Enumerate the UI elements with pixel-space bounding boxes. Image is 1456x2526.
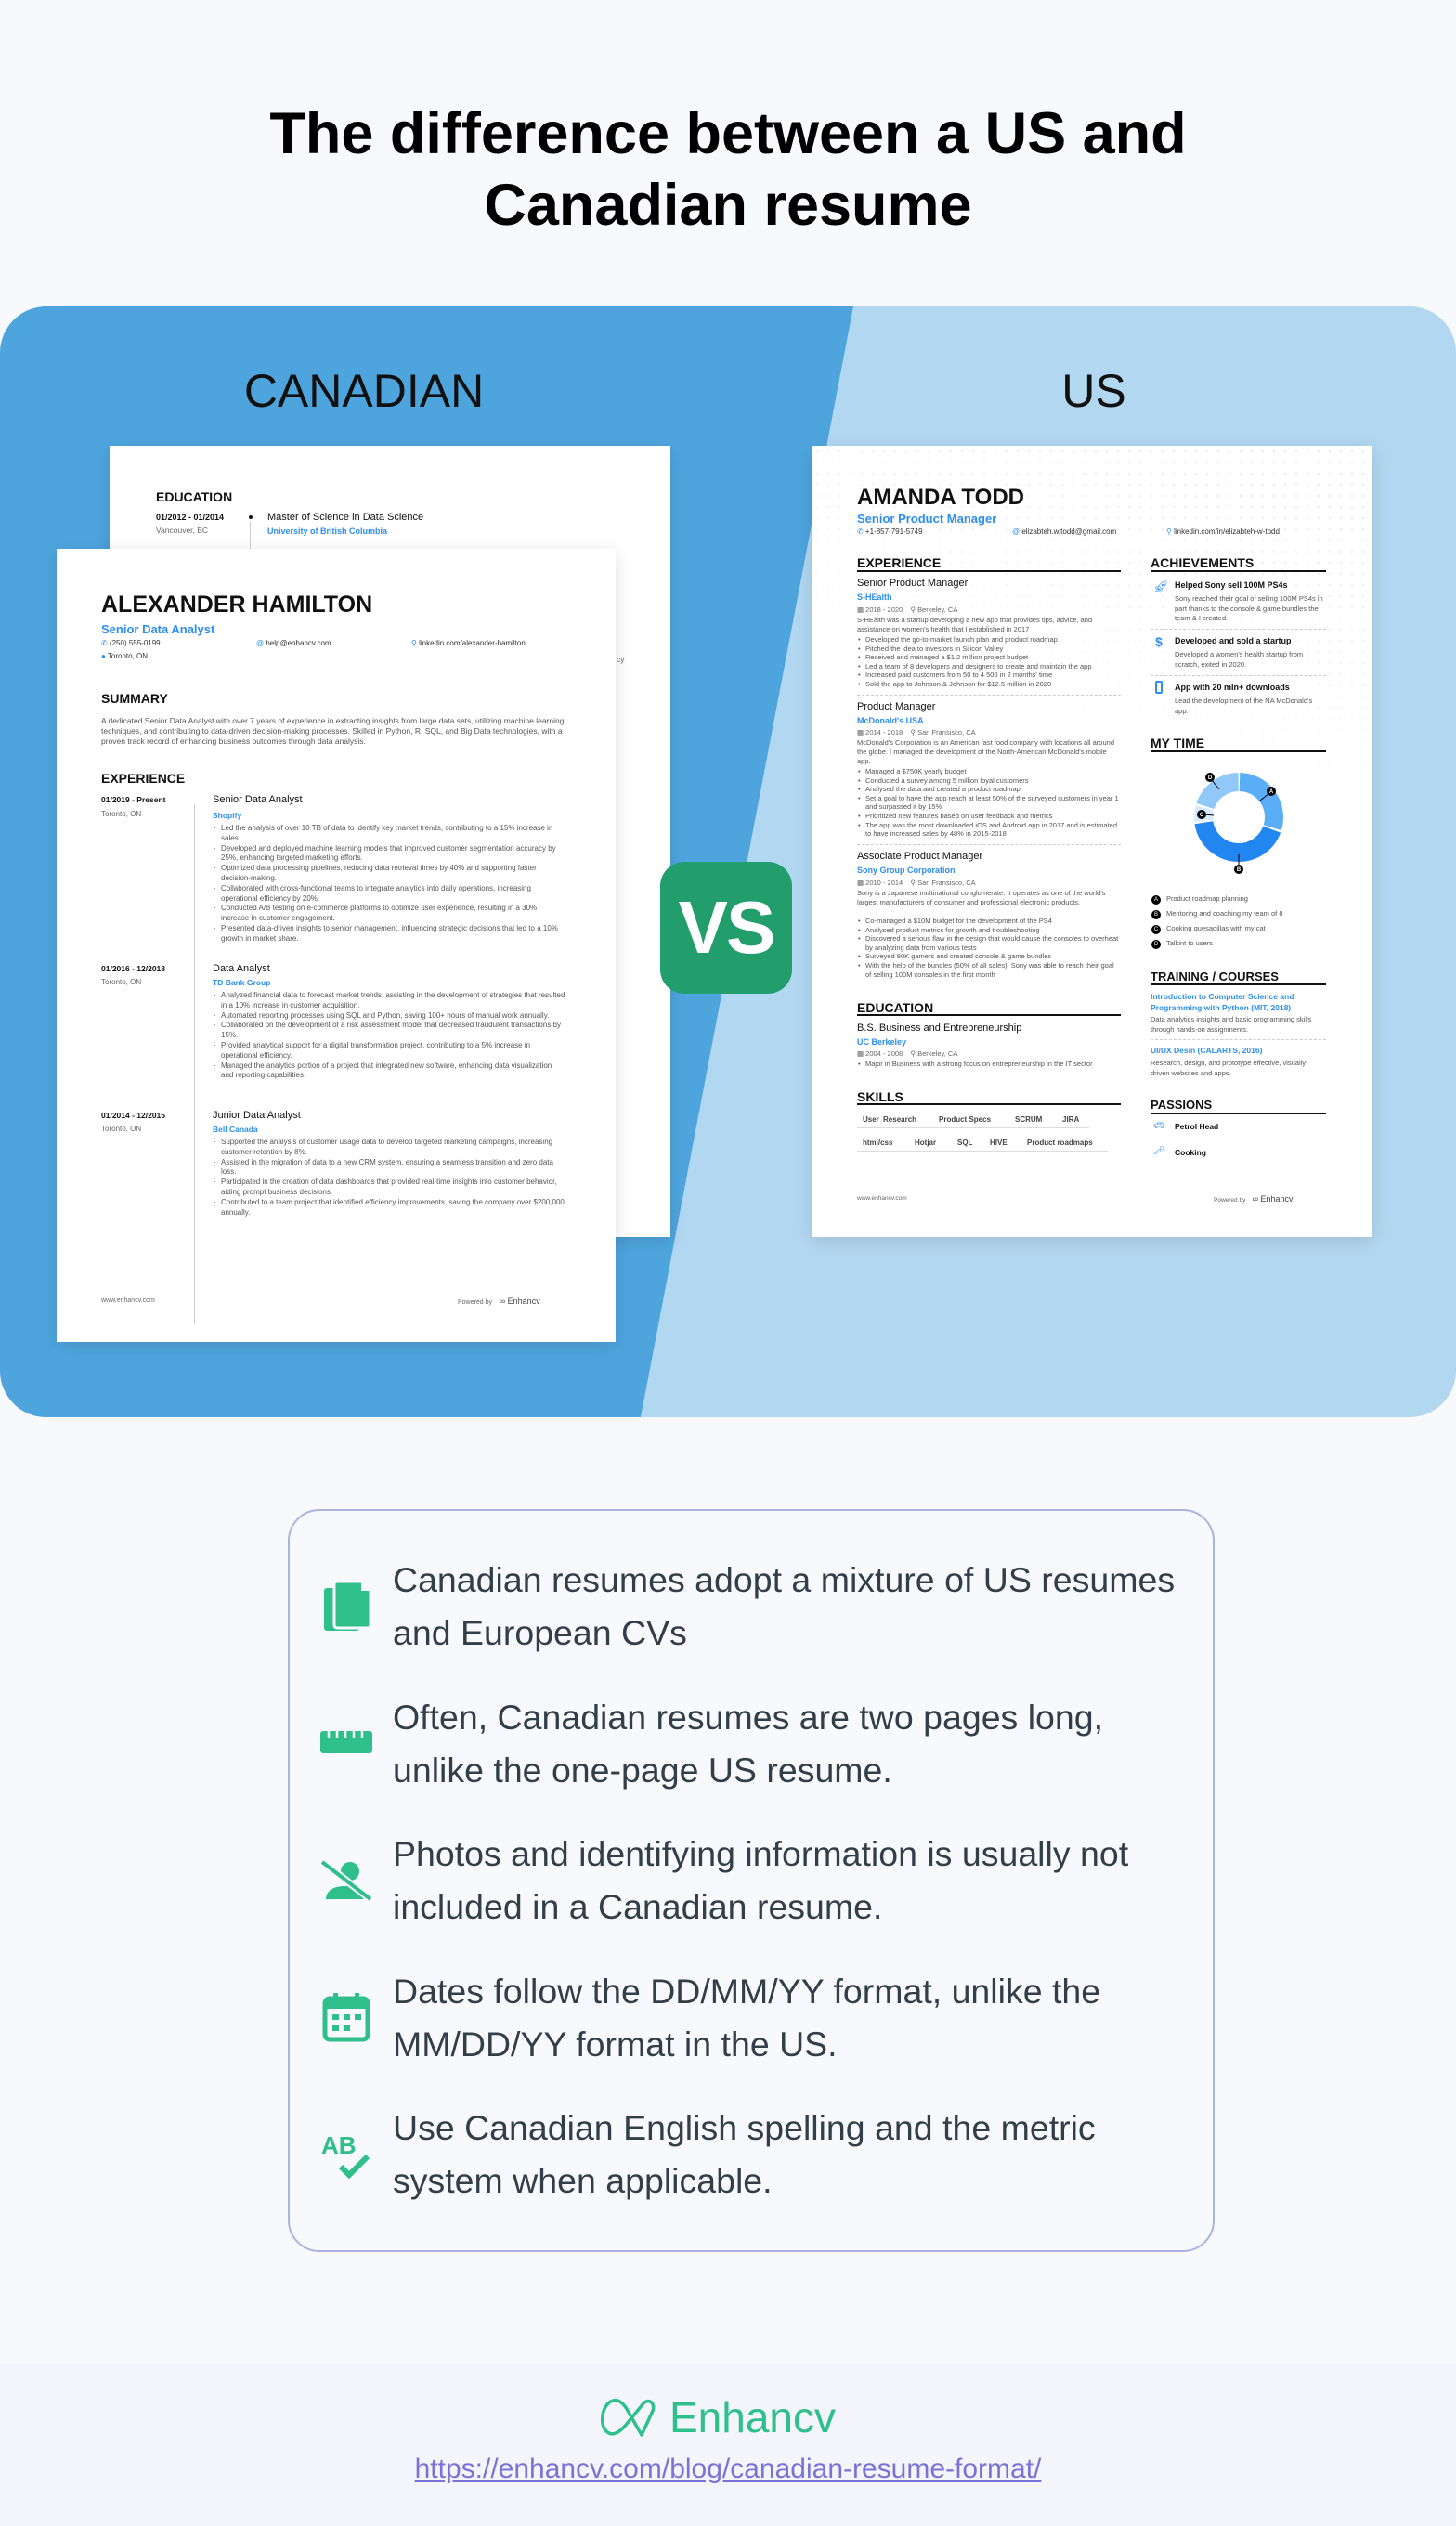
canadian resume: front page: EXPERIENCE — [101, 771, 185, 786]
item 1: mixture — [393, 1560, 1175, 1652]
us resume page: SQL — [957, 1139, 972, 1147]
item 1: mixture: Canadian resumes adopt a mixture of US resumes — [393, 1560, 1175, 1599]
canadian resume: front page: Optimized data processing pipelines, reducing data retrieval times by 40% and supporting faster decision-making. — [221, 864, 537, 882]
us resume page: Product roadmap planning — [1166, 894, 1248, 903]
us resume page: B — [1154, 912, 1158, 918]
us resume page: Prioritized new features based on user feedback and metrics — [865, 812, 1052, 820]
us resume page: HIVE — [990, 1139, 1008, 1147]
item 2: two pages: unlike the one-page US resume. — [393, 1751, 892, 1790]
VS badge — [660, 862, 792, 994]
us resume page: 🥕︎ — [1153, 1146, 1165, 1156]
source url: https://enhancv.com/blog/canadian-resume-format/ — [415, 2454, 1041, 2484]
us resume page: Introduction to Computer Science and Programming with Python (MIT, 2018) — [1150, 992, 1294, 1012]
title: Canadian resume — [484, 173, 972, 238]
canadian resume: front page: Collaborated with cross-functional teams to integrate analytics into daily operations, increasing operational efficiency by 20%. — [221, 884, 531, 903]
canadian resume: front page — [57, 549, 616, 1342]
us resume page: The app was the most downloaded iOS and Android app in 2017 and is estimated to have increased sales by 48% in 2015-2018 — [865, 821, 1117, 838]
us resume page: ▦ 2018 - 2020 ⚲ Berkeley, CA — [857, 605, 957, 614]
panel: comparison background — [0, 306, 1456, 1417]
canadian resume: front page: ✆ (250) 555-0199 — [101, 639, 161, 647]
canadian resume: front page: Supported the analysis of customer usage data to develop targeted marketing campaigns, increasing customer retention by 8%. — [221, 1138, 552, 1156]
us resume page: Talkint to users — [1166, 939, 1213, 947]
us resume page: McDonald's Corporation is an American fast food company with locations all around the globe. I managed the development of the North-American McDonald's mobile app. — [857, 738, 1114, 765]
canadian resume: front page: 01/2019 - Present — [101, 795, 165, 804]
heading: CANADIAN: CANADIAN — [244, 365, 484, 417]
canadian resume: front page: Toronto, ON — [101, 810, 141, 818]
footer band — [0, 2364, 1456, 2526]
canadian resume: front page: ALEXANDER HAMILTON — [101, 592, 372, 618]
icon: calendar — [323, 1993, 370, 2041]
us resume page: Product Specs — [939, 1115, 991, 1124]
us resume page: Developed and sold a startup — [1175, 636, 1292, 645]
footer logo: Enhancv — [670, 2393, 836, 2441]
us resume page: Set a goal to have the app reach at least 50% of the surveyed customers in year 1 and surpassed it by 15% — [865, 794, 1119, 811]
us resume page: Surveyed 80K gamers and created console & game bundles — [865, 952, 1051, 960]
canadian resume: front page: Contributed to a team project that identified efficiency improvements, saving the company over $200,000 annually. — [221, 1198, 565, 1217]
canadian resume: front page: Collaborated on the development of a risk assessment model that decreased fraudulent transactions by 15%. — [221, 1021, 561, 1039]
item 3: photos: Photos and identifying information is usually not — [393, 1834, 1128, 1873]
us resume page: B.S. Business and Entrepreneurship — [857, 1022, 1021, 1034]
canadian resume: front page: Bell Canada — [213, 1125, 258, 1134]
us resume page: Data analytics insights and basic programming skills through hands-on assignments. — [1150, 1015, 1311, 1033]
us resume page: Analysed the data and created a product roadmap — [865, 785, 1020, 793]
us resume page: Analysed product metrics for growth and troubleshooting — [865, 926, 1040, 934]
canadian resume: front page: Powered by ∞ Enhancv — [458, 1296, 540, 1306]
us resume page: C — [1154, 927, 1158, 932]
us resume page: D — [1154, 942, 1158, 947]
us resume page: Helped Sony sell 100M PS4s — [1175, 580, 1288, 590]
canadian resume: front page: www.enhancv.com — [101, 1297, 155, 1304]
us resume page: Conducted a survey among 5 million loyal customers — [865, 776, 1029, 785]
item 4: dates: Dates follow the DD/MM/YY format, unlike the — [393, 1972, 1100, 2011]
item 2: two pages — [393, 1698, 1103, 1790]
us resume page: html/css — [863, 1139, 892, 1147]
us resume page: Powered by ∞ Enhancv — [1214, 1194, 1294, 1204]
us resume page: Product Manager — [857, 701, 935, 712]
us resume page: Received and managed a $1.2 million project budget — [865, 653, 1028, 661]
us resume page: Cooking — [1175, 1148, 1206, 1157]
item 5: spelling: system when applicable. — [393, 2161, 773, 2200]
canadian resume: front page: TD Bank Group — [213, 978, 270, 987]
canadian resume: front page: 01/2016 - 12/2018 — [101, 964, 165, 973]
canadian resume: front page: ● Toronto, ON — [101, 652, 148, 660]
donut chart: C — [1200, 813, 1204, 818]
item 4: dates — [393, 1972, 1100, 2064]
canadian resume: front page: Conducted A/B testing on e-commerce platforms to optimize user experience, resulting in a 30% increase in customer engagement. — [221, 904, 537, 922]
donut chart: A — [1269, 789, 1274, 795]
canadian resume: back page: EDUCATION — [156, 489, 232, 504]
us resume page: A — [1154, 897, 1158, 903]
us resume page: JIRA — [1062, 1115, 1079, 1124]
canadian resume: back page: Master of Science in Data Science — [267, 512, 423, 523]
donut chart: D — [1208, 775, 1213, 781]
canadian resume: front page: Presented data-driven insights to senior management, influencing strategic decisions that led to a 10% growth in market share. — [221, 924, 558, 943]
title: The difference between a US and — [269, 101, 1187, 166]
us resume page: Developed the go-to-market launch plan and product roadmap — [865, 635, 1058, 644]
canadian resume: front page: Shopify — [213, 811, 241, 820]
us resume page: ✆ +1-857-791-5749 — [857, 527, 923, 536]
item 3: photos — [393, 1834, 1128, 1926]
item 4: dates: MM/DD/YY format in the US. — [393, 2025, 838, 2064]
us resume page: Petrol Head — [1175, 1122, 1218, 1131]
us resume page: Discovered a serious flaw in the design that would cause the consoles to overheat by analyzing data from various tests — [865, 934, 1118, 952]
item 2: two pages: Often, Canadian resumes are two pages long, — [393, 1698, 1103, 1737]
us resume page: ▦ 2010 - 2014 ⚲ San Fransisco, CA — [857, 879, 976, 887]
item 5: spelling: Use Canadian English spelling and the metric — [393, 2108, 1096, 2147]
us resume page: TRAINING / COURSES — [1150, 970, 1279, 983]
us resume page: UI/UX Desin (CALARTS, 2016) — [1150, 1046, 1262, 1055]
heading: US: US — [1061, 365, 1126, 417]
canadian resume: front page: Senior Data Analyst — [213, 794, 303, 805]
us resume page: PASSIONS — [1150, 1098, 1212, 1112]
canadian resume: back page — [110, 446, 670, 1237]
us resume page: User Research — [863, 1115, 916, 1124]
item 5: spelling — [393, 2108, 1096, 2200]
us resume page: Sold the app to Johnson & Johnson for $12.5 million in 2020 — [865, 680, 1051, 688]
icon: documents — [324, 1582, 370, 1631]
icon: ruler — [320, 1731, 372, 1753]
us resume page: McDonald's USA — [857, 716, 924, 725]
us resume page: SCRUM — [1015, 1115, 1042, 1124]
us resume page: Co-managed a $10M budget for the development of the PS4 — [865, 917, 1052, 925]
us resume page: 🚗︎ — [1153, 1121, 1165, 1131]
us resume page: UC Berkeley — [857, 1037, 906, 1047]
us resume page: With the help of the bundles (50% of all sales), Sony was able to reach their goal of selling 100M consoles in the first month — [865, 961, 1114, 979]
icon: AB check — [321, 2131, 370, 2179]
us resume page: $ — [1155, 634, 1163, 649]
canadian resume: back page: Vancouver, BC — [156, 526, 208, 535]
canadian resume: front page: 01/2014 - 12/2015 — [101, 1111, 165, 1120]
us resume page: App with 20 mln+ downloads — [1175, 683, 1290, 692]
us resume page: Mentoring and coaching my team of 8 — [1166, 909, 1283, 918]
us resume page: Pitched the idea to investors in Silicon Valley — [865, 645, 1003, 653]
canadian resume: front page: Provided analytical support for a digital transformation project, contributing to a 5% increase in operational efficiency. — [221, 1041, 530, 1060]
us resume page: Developed a women's health startup from scratch, exited in 2020. — [1175, 650, 1303, 669]
canadian resume: front page: A dedicated Senior Data Analyst with over 7 years of experience in extracting insights from large data sets, utilizing machine learning techniques, and contributing to data-driven decision-making processes. Skilled in Python, R, SQL, and Big Data technologies, with a proven track record of enhancing business outcomes through data analysis. — [101, 716, 564, 746]
us resume page: Sony reached their goal of selling 100M PS4s in part thanks to the console & game bundles the team & I created. — [1175, 594, 1323, 622]
us resume page: ▦ 2004 - 2008 ⚲ Berkeley, CA — [857, 1049, 957, 1058]
us resume page: AMANDA TODD — [857, 485, 1024, 510]
info box — [288, 1509, 1215, 2252]
us resume page: Sony Group Corporation — [857, 866, 955, 875]
us resume page: Led a team of 8 developers and designers to create and maintain the app — [865, 662, 1092, 671]
icon: no person — [321, 1860, 371, 1901]
us resume page: Senior Product Manager — [857, 512, 996, 526]
canadian resume: back page: cy — [617, 655, 624, 664]
us resume page: Hotjar — [915, 1139, 936, 1147]
canadian resume: front page: Toronto, ON — [101, 978, 141, 986]
us resume page: S-HEalth — [857, 592, 892, 602]
canadian resume: front page: Data Analyst — [213, 963, 270, 974]
us resume page: S-HEalth was a startup developing a new app that provides tips, advice, and assistance on women's health that I established in 2017 — [857, 616, 1092, 633]
us resume page: Lead the development of the NA McDonald's app. — [1175, 697, 1312, 715]
title — [269, 101, 1187, 238]
canadian resume: front page: Analyzed financial data to forecast market trends, assisting in the development of strategies that resulted in a 10% increase in customer acquisition. — [221, 991, 565, 1009]
donut chart — [1194, 773, 1283, 874]
us resume page: Research, design, and prototype effective, visually-driven websites and apps. — [1150, 1059, 1308, 1077]
us resume page: Associate Product Manager — [857, 851, 982, 862]
canadian resume: front page: Toronto, ON — [101, 1125, 141, 1133]
us resume page: Increased paid customers from 50 to 4 500 in 2 months' time — [865, 671, 1052, 679]
us resume page: Sony is a Japanese multinational conglomerate. It operates as one of the world's largest manufacturers of consumer and professional electronic products. — [857, 889, 1105, 906]
us resume page: EDUCATION — [857, 1000, 933, 1015]
canadian resume: front page: @ help@enhancv.com — [256, 639, 332, 647]
us resume page: ⚲ linkedin.com/in/elizabteh-w-todd — [1166, 527, 1280, 536]
canadian resume: front page: ⚲ linkedin.com/alexander-hamilton — [411, 639, 526, 647]
us resume page: 🚀︎ — [1153, 579, 1169, 593]
canadian resume: front page: Developed and deployed machine learning models that improved customer segmentation accuracy by 25%, enhancing targeted marketing efforts. — [221, 844, 556, 862]
us resume page — [812, 446, 1372, 1237]
us resume page: EXPERIENCE — [857, 555, 941, 570]
canadian resume: front page: Automated reporting processes using SQL and Python, saving 100+ hours of manual work annually. — [221, 1011, 549, 1020]
canadian resume: front page: Managed the analytics portion of a project that integrated new software, enhancing data visualization and reporting capabilities. — [221, 1061, 552, 1079]
canadian resume: front page: Senior Data Analyst — [101, 622, 214, 636]
donut chart: B — [1237, 867, 1242, 873]
canadian resume: back page: University of British Columbia — [267, 527, 387, 536]
us resume page: Managed a $750K yearly budget — [865, 767, 966, 775]
us resume page: www.enhancv.com — [857, 1195, 907, 1202]
us resume page: Cooking quesadillas with my cat — [1166, 924, 1266, 932]
canadian resume: front page: Assisted in the migration of data to a new CRM system, ensuring a seamless transition and zero data loss. — [221, 1158, 553, 1176]
canadian resume: front page: Junior Data Analyst — [213, 1110, 301, 1121]
us resume page: MY TIME — [1150, 736, 1204, 750]
canadian resume: front page: SUMMARY — [101, 691, 168, 706]
us resume page: ACHIEVEMENTS — [1150, 555, 1254, 570]
item 3: photos: included in a Canadian resume. — [393, 1887, 882, 1926]
us resume page: Product roadmaps — [1027, 1139, 1093, 1147]
canadian resume: front page: Participated in the creation of data dashboards that provided real-time insights into customer behavior, aiding prompt business decisions. — [221, 1178, 557, 1196]
item 1: mixture: and European CVs — [393, 1613, 687, 1652]
us resume page: SKILLS — [857, 1089, 904, 1104]
canadian resume: back page: 01/2012 - 01/2014 — [156, 513, 224, 522]
icon: AB check: AB — [321, 2131, 357, 2159]
us resume page: @ elizabteh.w.todd@gmail.com — [1012, 527, 1116, 536]
us resume page: Major in Business with a strong focus on entrepreneurship in the IT sector — [865, 1060, 1093, 1068]
VS badge: VS — [679, 886, 774, 969]
canadian resume: front page: Led the analysis of over 10 TB of data to identify key market trends, contributing to a 15% increase in sales. — [221, 824, 552, 842]
us resume page: ▦ 2014 - 2018 ⚲ San Fransisco, CA — [857, 728, 976, 736]
us resume page: Senior Product Manager — [857, 578, 968, 589]
